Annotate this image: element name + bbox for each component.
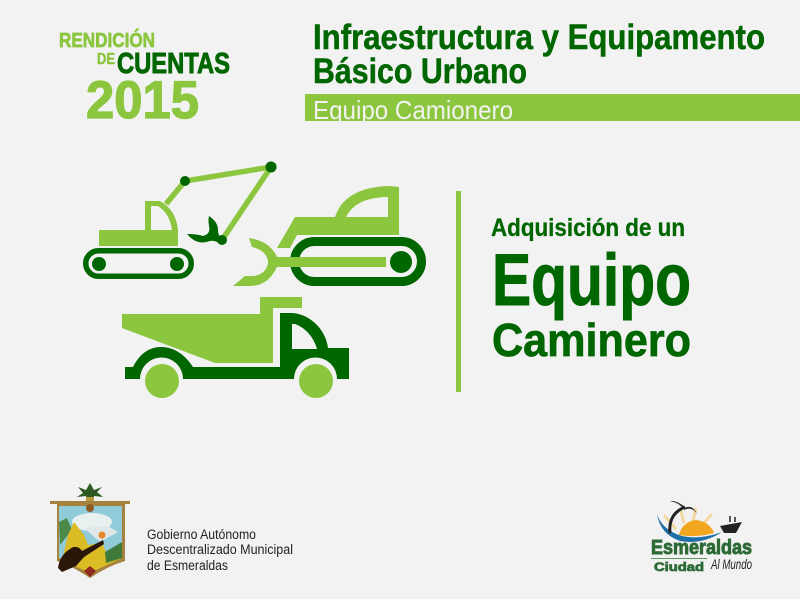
divider (456, 191, 461, 392)
title: Básico Urbano (313, 52, 527, 91)
organization name: Descentralizado Municipal (147, 542, 293, 557)
icon: excavator (86, 162, 276, 276)
organization name: de Esmeraldas (147, 558, 228, 573)
organization name (147, 527, 293, 573)
logo: Esmeraldas Ciudad al Mundo: Al Mundo (710, 556, 752, 572)
organization name: Gobierno Autónomo (147, 527, 256, 542)
subtitle bar (305, 94, 800, 125)
title (313, 18, 765, 91)
subtitle bar: Equipo Camionero (313, 95, 513, 125)
headline: Adquisición de un Equipo Caminero: Caminero (492, 314, 691, 366)
logo: Esmeraldas Ciudad al Mundo: Esmeraldas (651, 537, 752, 559)
headline: Adquisición de un Equipo Caminero: Equipo (492, 240, 691, 321)
icon: coat of arms (50, 483, 130, 578)
headline: Adquisición de un Equipo Caminero (491, 214, 691, 366)
logo: Rendición de Cuentas 2015: CUENTAS (117, 48, 230, 80)
logo: Esmeraldas Ciudad al Mundo (651, 501, 752, 574)
icon: bulldozer (233, 186, 422, 286)
logo: Rendición de Cuentas 2015 (59, 28, 230, 130)
logo: Rendición de Cuentas 2015: RENDICIÓN (59, 28, 155, 52)
logo: Rendición de Cuentas 2015: 2015 (86, 71, 199, 130)
logo: Rendición de Cuentas 2015: DE (97, 51, 115, 68)
headline: Adquisición de un Equipo Caminero: Adquisición de un (491, 214, 685, 242)
logo: Esmeraldas Ciudad al Mundo: Ciudad (654, 560, 704, 574)
icon: dump truck (122, 297, 349, 398)
